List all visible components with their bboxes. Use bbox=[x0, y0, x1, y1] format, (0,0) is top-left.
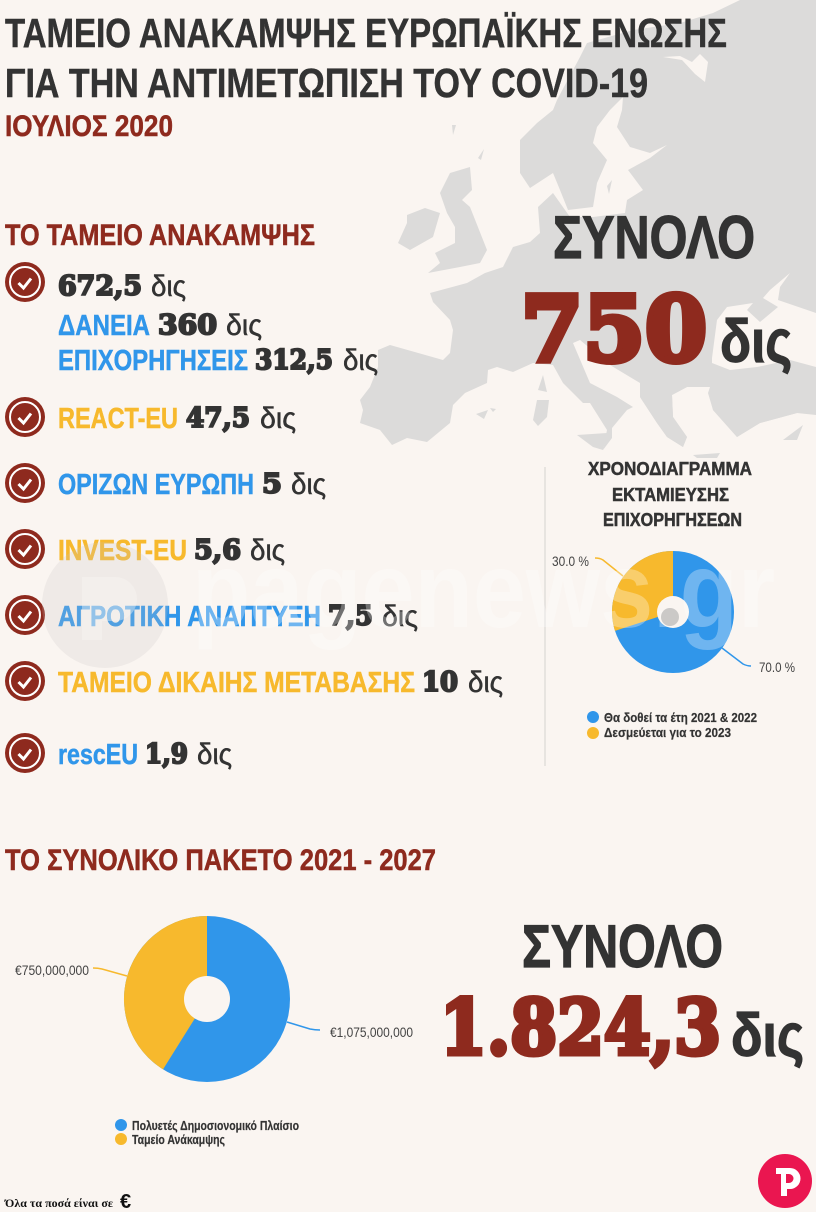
chart title: ΕΚΤΑΜΙΕΥΣΗΣ bbox=[612, 485, 729, 505]
item: Horizon Europe: δις bbox=[291, 468, 326, 501]
footnote: Όλα τα ποσά είναι σε bbox=[4, 1197, 113, 1210]
item: rescEU bbox=[5, 733, 232, 773]
item: REACT-EU: REACT-EU bbox=[58, 403, 178, 435]
seas over the map bbox=[663, 54, 816, 370]
fund list bbox=[5, 262, 503, 773]
item: InvestEU: INVEST-EU bbox=[58, 535, 187, 567]
logo: pagenews bbox=[758, 1154, 812, 1208]
donut chart: total package: €750,000,000 bbox=[15, 962, 89, 978]
item: 672,5: δις bbox=[343, 344, 378, 377]
title: ΓΙΑ ΤΗΝ ΑΝΤΙΜΕΤΩΠΙΣΗ ΤΟΥ COVID-19 bbox=[5, 60, 648, 106]
item: rescEU: δις bbox=[197, 738, 232, 771]
total 750 billion: 750 bbox=[521, 276, 707, 382]
legend: total package bbox=[115, 1118, 299, 1147]
item: 672,5: ΕΠΙΧΟΡΗΓΗΣΕΙΣ bbox=[58, 345, 248, 377]
donut chart: 70 / 30: 30.0 % bbox=[552, 553, 589, 569]
item: InvestEU bbox=[5, 529, 285, 569]
item: just transition fund bbox=[5, 661, 503, 701]
item: rescEU: 1,9 bbox=[145, 739, 188, 770]
legend: total package: Πολυετές Δημοσιονομικό Πλαίσιο bbox=[132, 1118, 299, 1133]
total 1.824,3 billion bbox=[440, 913, 804, 1072]
total 750 billion: ΣΥΝΟΛΟ bbox=[553, 204, 755, 271]
donut chart: 70 / 30: 70.0 % bbox=[759, 659, 795, 675]
footnote bbox=[4, 1191, 131, 1212]
total 1.824,3 billion: δις bbox=[731, 1002, 804, 1069]
item: rural development: ΑΓΡΟΤΙΚΗ ΑΝΑΠΤΥΞΗ bbox=[58, 601, 321, 633]
donut chart: total package bbox=[15, 916, 413, 1082]
background map of Europe bbox=[360, 0, 816, 458]
item: REACT-EU: 47,5 bbox=[186, 403, 250, 434]
item: 672,5 bbox=[5, 262, 378, 377]
total 1.824,3 billion: ΣΥΝΟΛΟ bbox=[522, 913, 723, 980]
chart title: ΧΡΟΝΟΔΙΑΓΡΑΜΜΑ bbox=[588, 459, 752, 479]
item: 672,5: 672,5 bbox=[58, 271, 142, 302]
heading: total package: ΤΟ ΣΥΝΟΛΙΚΟ ΠΑΚΕΤΟ 2021 - 2027 bbox=[5, 844, 436, 877]
legend: Δεσμεύεται για το 2023 bbox=[604, 725, 731, 740]
item: Horizon Europe: 5 bbox=[262, 469, 282, 500]
title bbox=[5, 10, 727, 106]
heading: recovery fund: ΤΟ ΤΑΜΕΙΟ ΑΝΑΚΑΜΨΗΣ bbox=[5, 219, 315, 252]
legend: total package: Ταμείο Ανάκαμψης bbox=[132, 1132, 225, 1147]
chart title: ΕΠΙΧΟΡΗΓΗΣΕΩΝ bbox=[603, 510, 742, 530]
item: REACT-EU bbox=[5, 397, 296, 437]
item: 672,5: ΔΑΝΕΙΑ bbox=[58, 310, 150, 342]
item: just transition fund: ΤΑΜΕΙΟ ΔΙΚΑΙΗΣ ΜΕΤΑΒΑΣΗΣ bbox=[58, 667, 415, 699]
item: 672,5: δις bbox=[151, 270, 186, 303]
item: Horizon Europe bbox=[5, 463, 326, 503]
legend: Θα δοθεί τα έτη 2021 & 2022 bbox=[604, 710, 757, 725]
item: 672,5: 360 bbox=[158, 310, 217, 341]
total 1.824,3 billion: 1.824,3 bbox=[440, 983, 721, 1072]
total 750 billion: δις bbox=[720, 308, 792, 375]
item: rural development: 7,5 bbox=[328, 601, 373, 632]
watermark: pagenews.gr bbox=[42, 529, 775, 668]
item: InvestEU: δις bbox=[250, 534, 285, 567]
item: rescEU: rescEU bbox=[58, 739, 138, 771]
item: rural development: δις bbox=[382, 600, 418, 633]
panel: disbursement schedule bbox=[552, 459, 795, 740]
item: Horizon Europe: ΟΡΙΖΩΝ ΕΥΡΩΠΗ bbox=[58, 469, 254, 501]
date subtitle: ΙΟΥΛΙΟΣ 2020 bbox=[5, 110, 173, 143]
donut chart: total package: €1,075,000,000 bbox=[330, 1024, 413, 1040]
item: just transition fund: δις bbox=[468, 666, 503, 699]
chart title bbox=[588, 459, 752, 530]
item: REACT-EU: δις bbox=[260, 402, 296, 435]
center dot in donut bbox=[661, 608, 679, 626]
item: just transition fund: 10 bbox=[422, 667, 458, 698]
legend bbox=[587, 710, 757, 740]
item: 672,5: 312,5 bbox=[255, 345, 333, 376]
total 750 billion bbox=[521, 204, 792, 382]
item: 672,5: δις bbox=[226, 309, 262, 342]
donut chart: 70 / 30 bbox=[552, 551, 795, 675]
item: rural development bbox=[5, 595, 418, 635]
item: InvestEU: 5,6 bbox=[194, 535, 241, 566]
